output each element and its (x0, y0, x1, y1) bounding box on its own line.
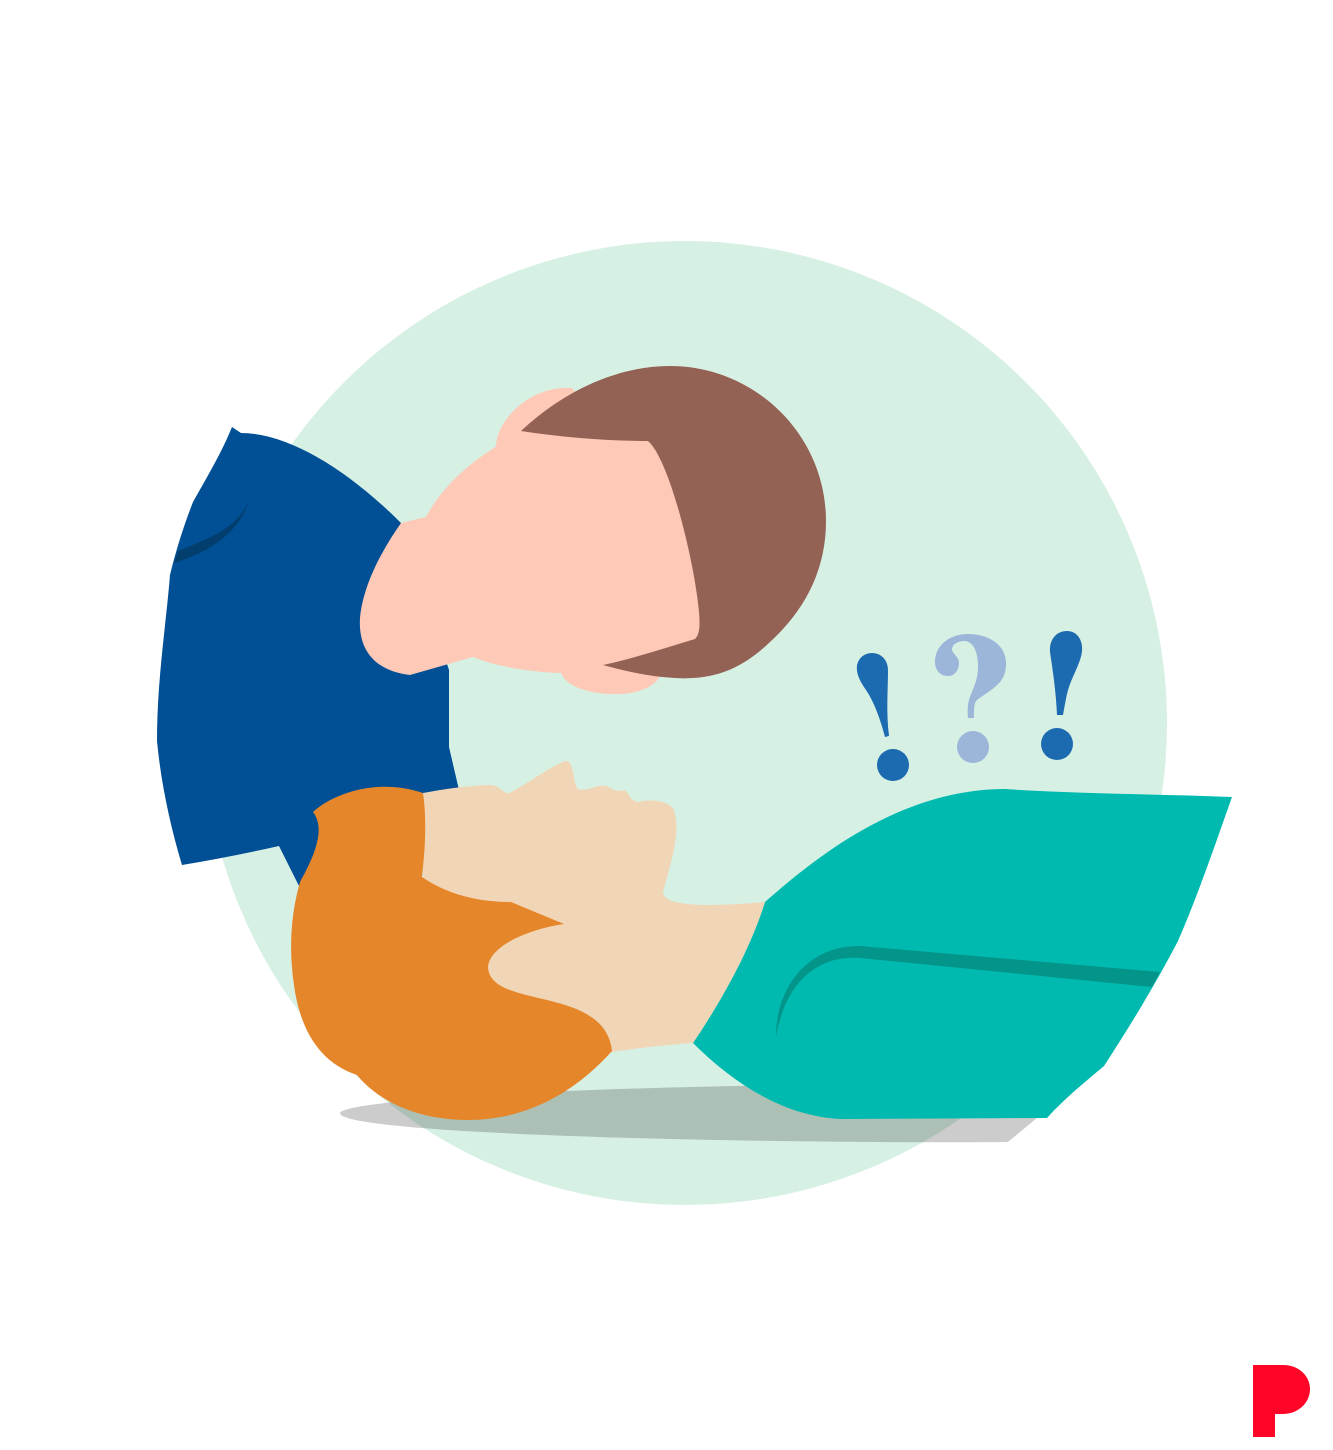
victim body (693, 789, 1232, 1119)
rescuer (157, 366, 826, 900)
right exclamation mark (1041, 631, 1082, 760)
rescuer ear (496, 388, 600, 450)
rescuer face (360, 425, 730, 675)
rescuer shirt (157, 427, 459, 900)
rescuer lower ear (561, 660, 660, 694)
victim (291, 761, 1232, 1120)
arm crease (776, 946, 1160, 1037)
ground shadow (340, 1085, 1037, 1142)
shirt fold (174, 500, 249, 563)
victim hair (291, 787, 612, 1120)
logo (1253, 1365, 1310, 1437)
rescuer hair (521, 366, 826, 678)
victim face and neck (423, 761, 765, 1052)
left exclamation mark (857, 653, 909, 781)
background circle (203, 241, 1167, 1205)
question mark (935, 634, 1006, 763)
